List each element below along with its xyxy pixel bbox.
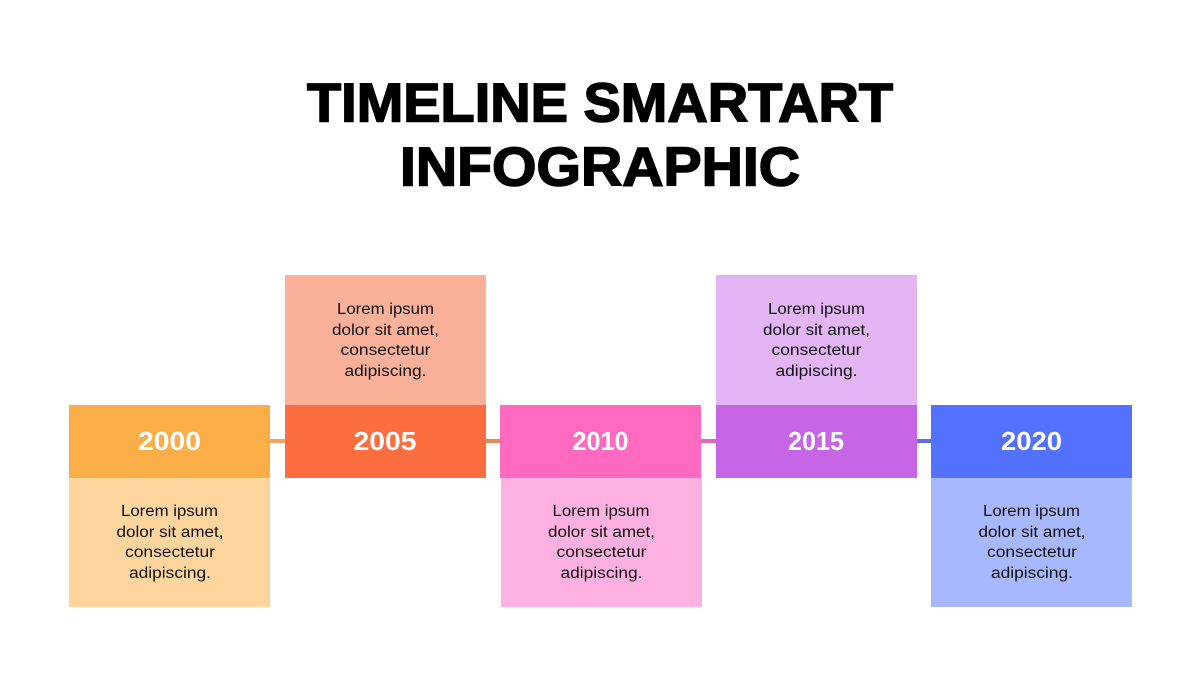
description text: 2005: Lorem ipsum	[337, 301, 434, 318]
milestone: 2005	[285, 275, 486, 478]
year label: 2005: 2005	[354, 426, 416, 456]
description panel: 2020	[931, 478, 1132, 607]
description text: 2020: adipiscing.	[991, 565, 1073, 582]
description text: 2015: dolor sit amet,	[763, 322, 870, 339]
title: INFOGRAPHIC	[400, 136, 800, 198]
year label: 2010: 2010	[572, 426, 628, 456]
description text: 2015: consectetur	[772, 342, 862, 359]
description text: 2015: adipiscing.	[776, 363, 858, 380]
description text: 2010: adipiscing.	[560, 565, 642, 582]
description text: 2015	[763, 301, 870, 380]
description text: 2000: adipiscing.	[129, 565, 211, 582]
connector: 2005 to 2010	[486, 439, 500, 443]
year box: 2020	[931, 405, 1132, 478]
milestone: 2010	[500, 405, 702, 607]
year box: 2015	[716, 405, 917, 478]
description text: 2000: consectetur	[125, 544, 215, 561]
description text: 2020: dolor sit amet,	[978, 524, 1086, 541]
milestone: 2000	[69, 405, 270, 607]
description text: 2020: Lorem ipsum	[983, 503, 1080, 520]
year label: 2020: 2020	[1001, 426, 1062, 456]
connector: 2000 to 2005	[270, 439, 285, 443]
description panel: 2015	[716, 275, 917, 405]
description text: 2005: dolor sit amet,	[332, 322, 439, 339]
description text: 2010: Lorem ipsum	[552, 503, 650, 520]
description text: 2000: Lorem ipsum	[121, 503, 218, 520]
year label: 2000: 2000	[138, 426, 201, 456]
year box: 2010	[500, 405, 701, 478]
description text: 2005	[332, 301, 439, 380]
description text: 2000	[116, 503, 224, 582]
year label: 2015: 2015	[788, 426, 844, 456]
description text: 2015: Lorem ipsum	[768, 301, 865, 318]
description text: 2010: dolor sit amet,	[548, 524, 655, 541]
description text: 2005: adipiscing.	[344, 363, 426, 380]
year box: 2000	[69, 405, 270, 478]
description text: 2020: consectetur	[987, 544, 1077, 561]
description panel: 2005	[285, 275, 486, 405]
title	[307, 72, 893, 198]
connector: 2010 to 2015	[701, 439, 716, 443]
description text: 2005: consectetur	[340, 342, 430, 359]
milestone: 2020	[931, 405, 1132, 607]
description panel: 2000	[69, 478, 270, 607]
description text: 2000: dolor sit amet,	[116, 524, 224, 541]
description text: 2010	[548, 503, 655, 582]
description text: 2010: consectetur	[556, 544, 646, 561]
connector: 2015 to 2020	[917, 439, 931, 443]
description text: 2020	[978, 503, 1086, 582]
milestone: 2015	[716, 275, 917, 478]
title: TIMELINE SMARTART	[307, 72, 893, 134]
description panel: 2010	[501, 478, 702, 607]
year box: 2005	[285, 405, 486, 478]
